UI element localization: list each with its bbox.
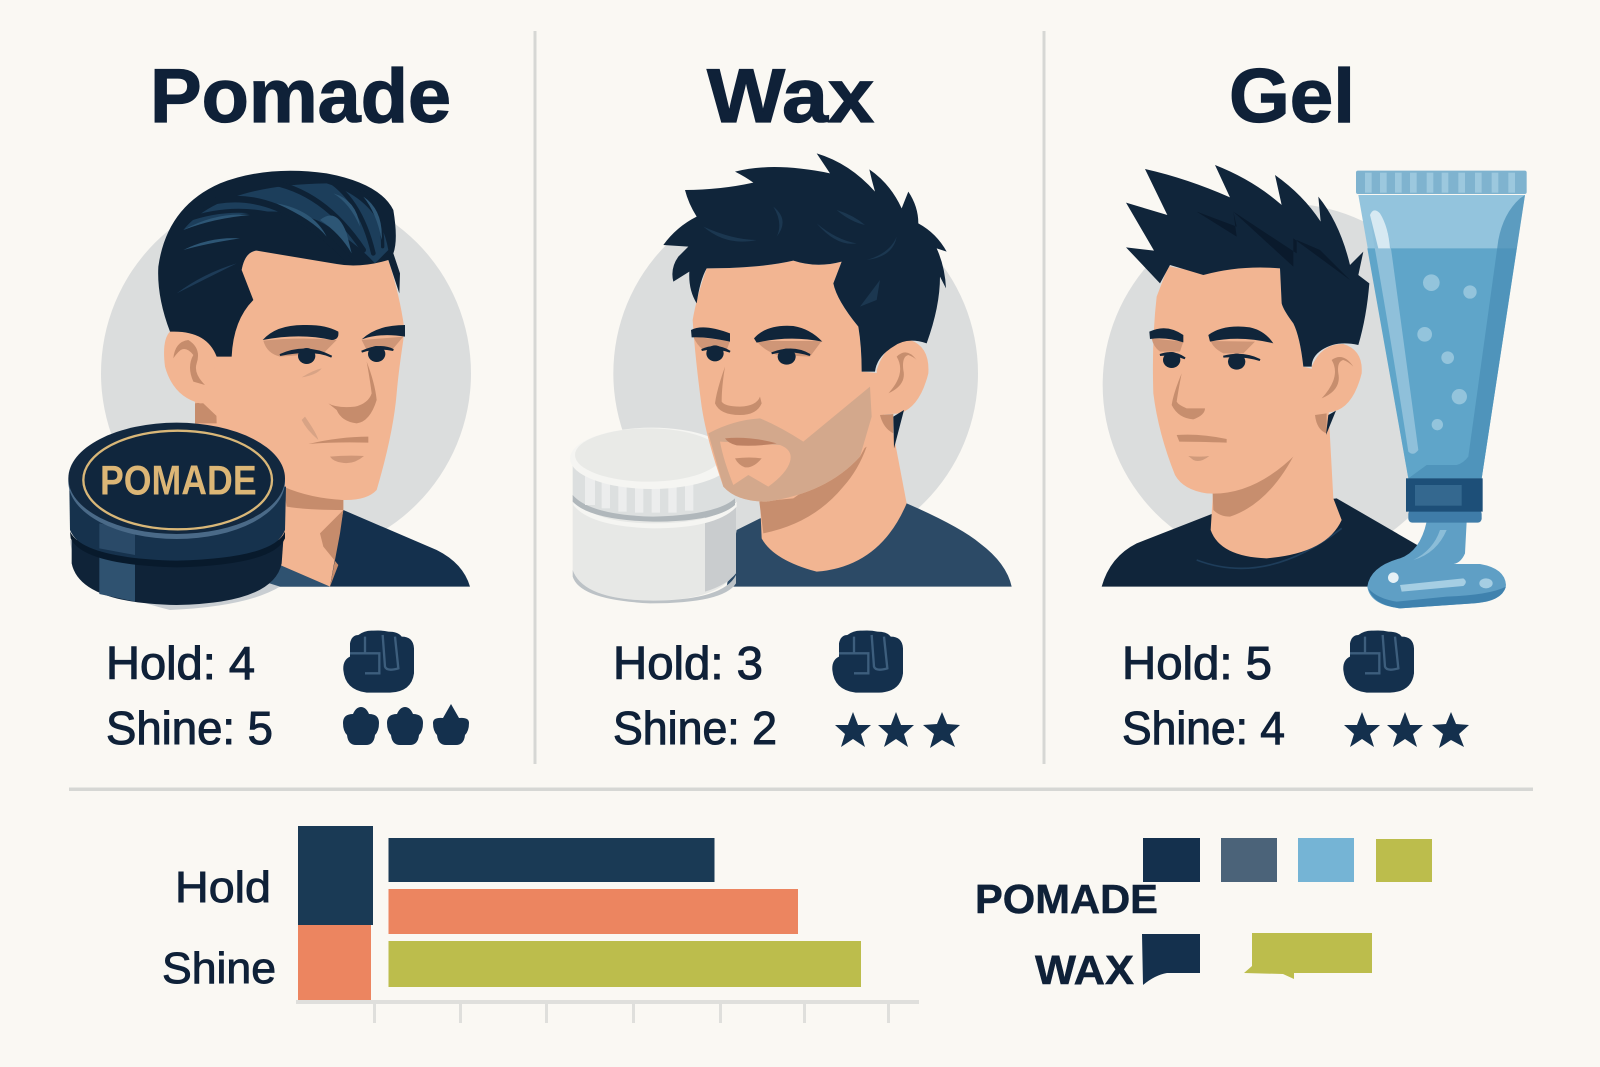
bar: olive xyxy=(388,941,861,987)
bar chart xyxy=(162,826,919,1023)
legend bubble: olive xyxy=(1244,933,1372,979)
stats: gel hold: Hold: 5 xyxy=(1122,637,1272,689)
icon: pomade shine stars xyxy=(343,704,469,745)
stats: pomade shine: Shine: 5 xyxy=(106,702,273,754)
swatch: navy xyxy=(1143,838,1200,882)
legend label: POMADE: POMADE xyxy=(975,876,1158,922)
icon: gel shine stars xyxy=(1344,712,1469,748)
gel tube xyxy=(1356,171,1527,608)
illustration: gel man and tube xyxy=(1102,165,1527,608)
stats: wax shine: Shine: 2 xyxy=(613,702,777,754)
icon: wax fist xyxy=(832,630,903,693)
bar: orange xyxy=(388,889,798,934)
swatch: blue xyxy=(1298,838,1354,882)
icon: gel fist xyxy=(1343,630,1414,693)
icon: pomade fist xyxy=(343,630,414,693)
tin label: POMADE xyxy=(100,457,257,503)
chart label: Shine: Shine xyxy=(162,944,276,993)
illustration: pomade man and tin xyxy=(68,171,471,610)
legend xyxy=(975,838,1432,993)
swatch: slate xyxy=(1221,838,1277,882)
legend bubble: navy xyxy=(1142,934,1200,985)
chart label: Hold: Hold xyxy=(175,863,271,912)
icon: wax shine stars xyxy=(835,712,960,748)
wax jar xyxy=(570,428,737,603)
title: Wax: Wax xyxy=(707,54,874,139)
stats: pomade hold: Hold: 4 xyxy=(106,637,255,689)
stats: gel shine: Shine: 4 xyxy=(1122,702,1285,754)
bar: navy xyxy=(388,838,714,882)
title: Pomade: Pomade xyxy=(150,54,451,139)
swatch: olive xyxy=(1376,839,1432,882)
title: Gel: Gel xyxy=(1229,54,1355,139)
legend label: WAX: WAX xyxy=(1035,947,1134,993)
illustration: wax man and jar xyxy=(570,153,1012,603)
stats: wax hold: Hold: 3 xyxy=(613,637,763,689)
stacked column xyxy=(298,826,373,925)
